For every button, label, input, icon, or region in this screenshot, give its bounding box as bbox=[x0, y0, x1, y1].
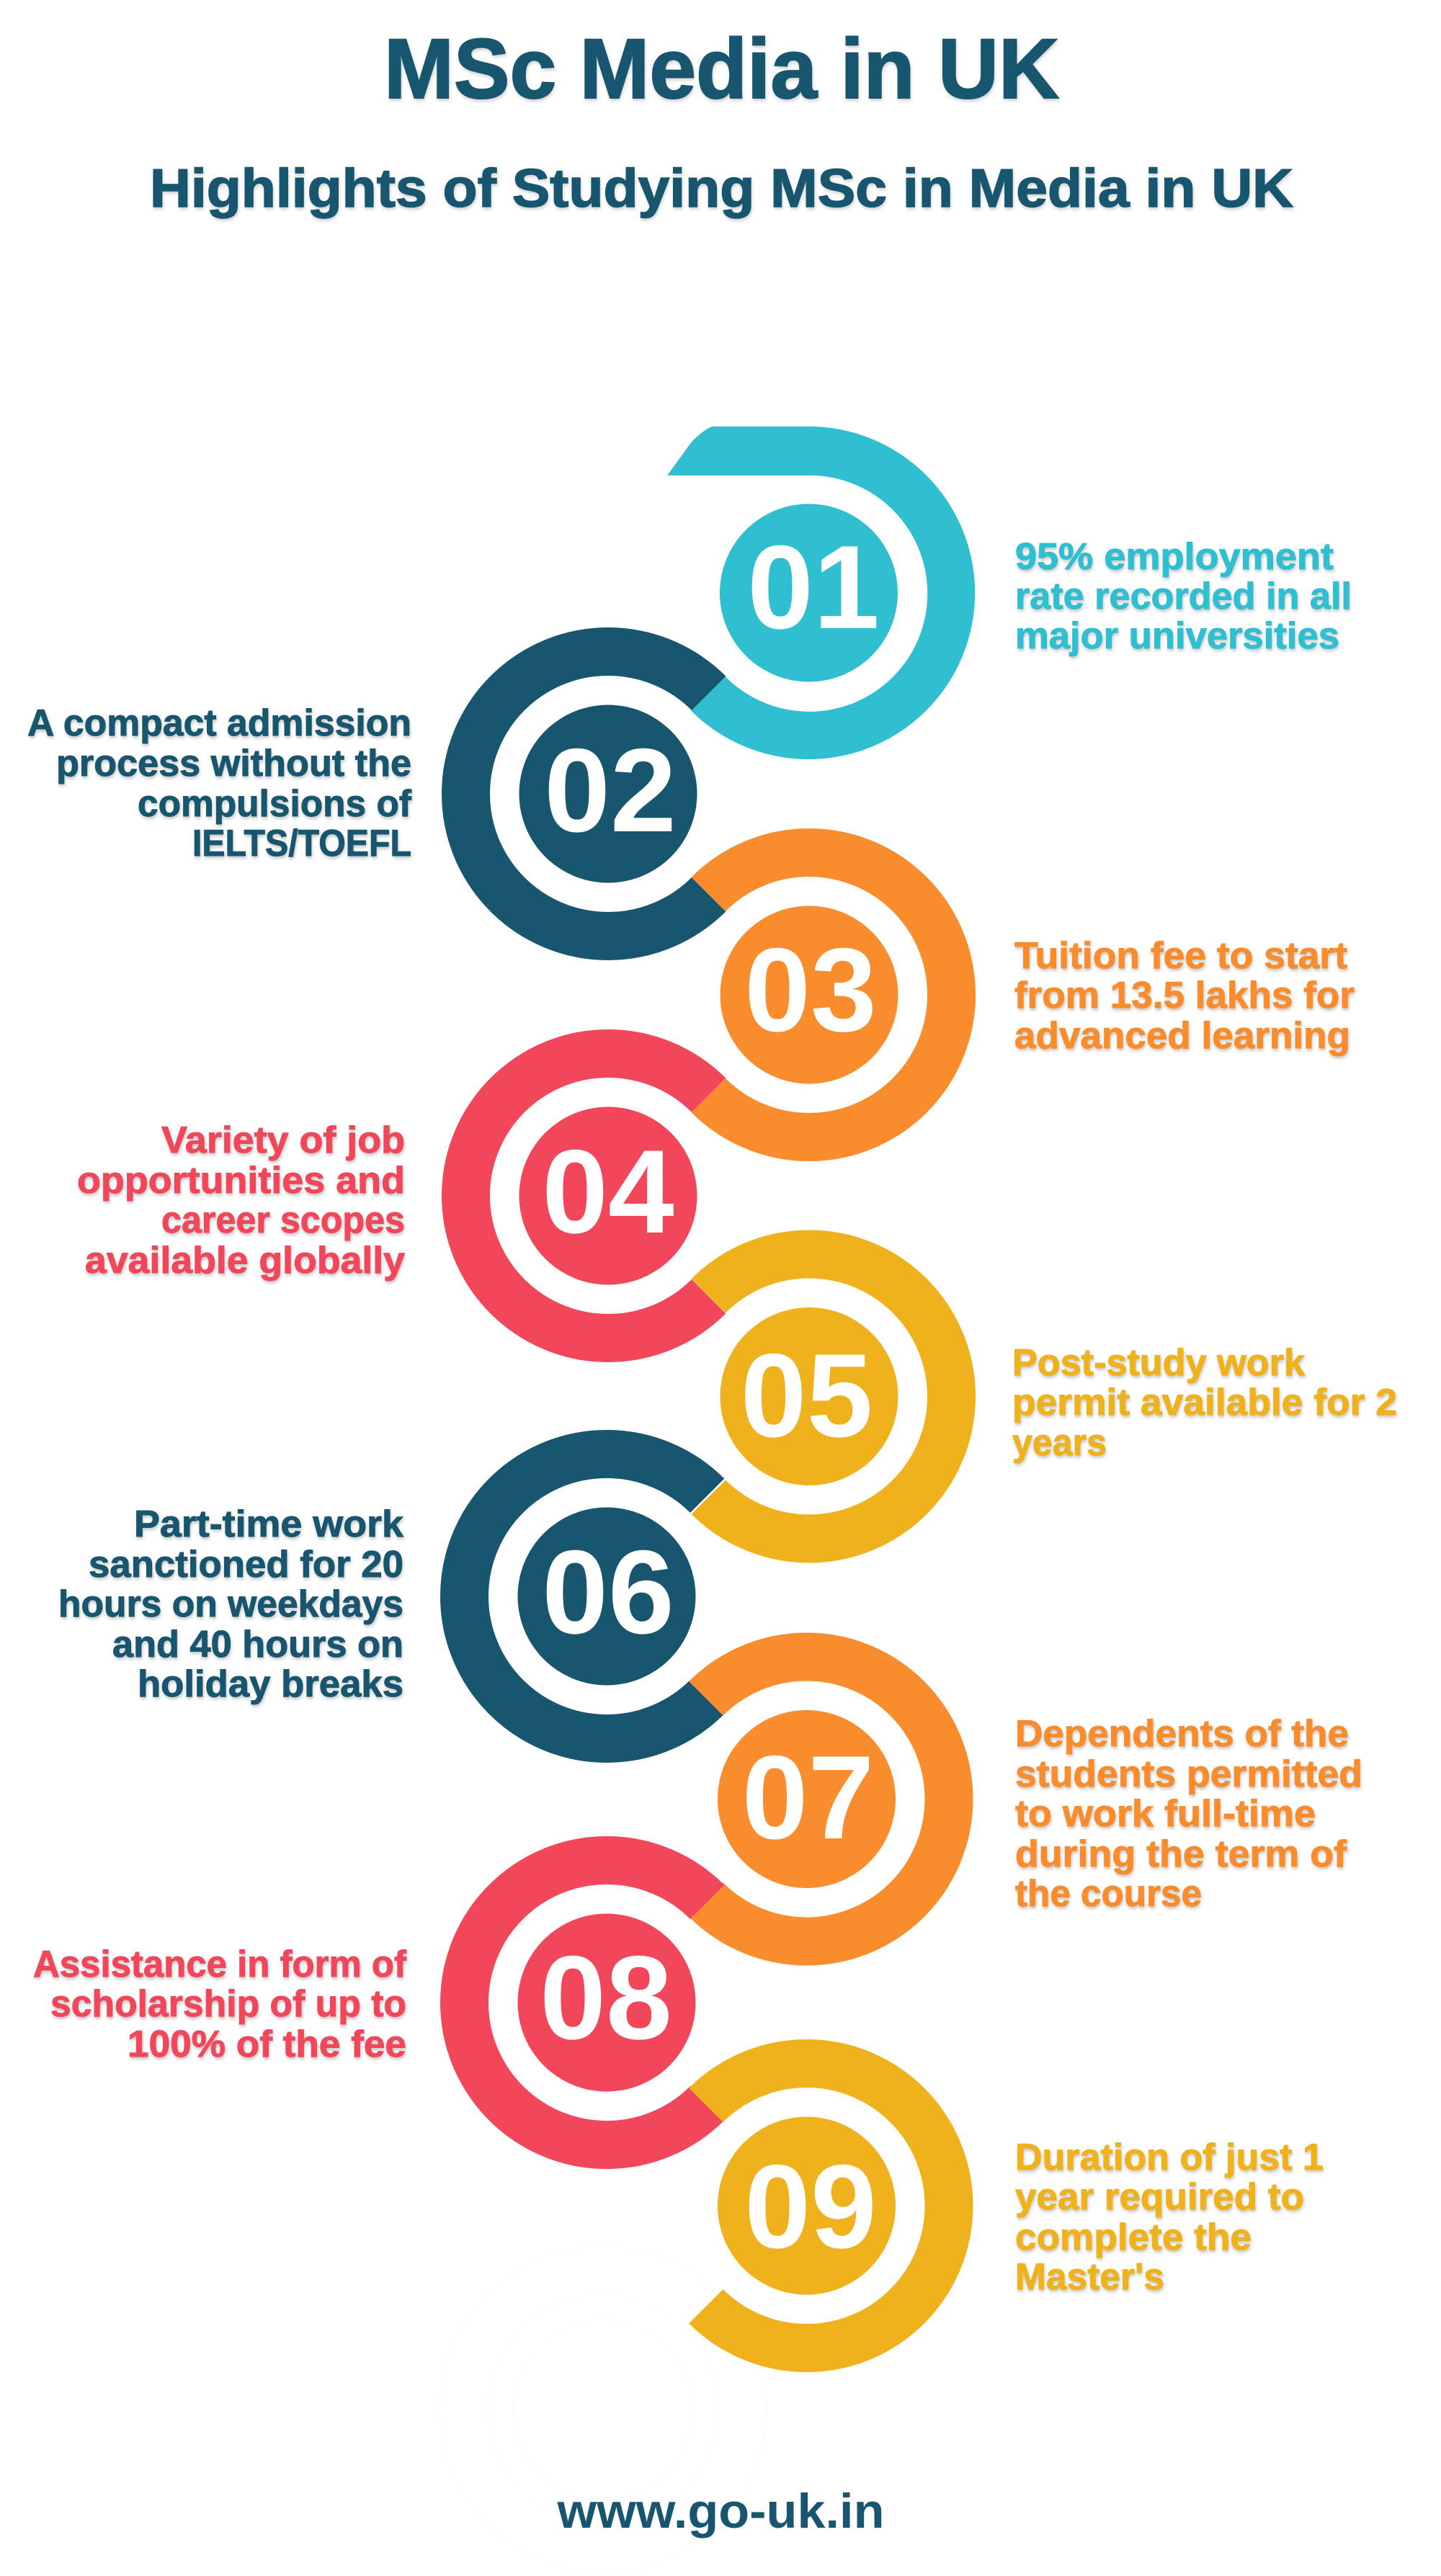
step 06 bbox=[58, 1454, 708, 1739]
badge 03 bbox=[720, 906, 898, 1083]
title: MSc Media in UK bbox=[384, 22, 1059, 117]
text 06 bbox=[58, 1503, 403, 1705]
step 03 bbox=[708, 853, 1355, 1137]
text 02 bbox=[27, 702, 412, 864]
step 09 bbox=[706, 2063, 1324, 2348]
text 04: opportunities and bbox=[77, 1160, 405, 1202]
text 06: and 40 hours on bbox=[112, 1624, 403, 1665]
number 05: 05 bbox=[741, 1329, 873, 1462]
text 08: Assistance in form of bbox=[33, 1944, 407, 1985]
text 06: sanctioned for 20 bbox=[89, 1544, 403, 1586]
text 09: Duration of just 1 bbox=[1015, 2137, 1324, 2178]
step 07 bbox=[706, 1657, 1362, 1941]
step 05 bbox=[708, 1254, 1397, 1539]
text 05: permit available for 2 bbox=[1012, 1382, 1397, 1423]
number 07: 07 bbox=[742, 1731, 874, 1864]
number 01: 01 bbox=[747, 521, 880, 653]
faint ghost circle bbox=[440, 2246, 767, 2573]
ring 04 bbox=[465, 1054, 709, 1338]
subtitle: Highlights of Studying MSc in Media in UK bbox=[150, 158, 1293, 218]
step 01 bbox=[667, 426, 1352, 759]
text 05: Post-study work bbox=[1012, 1342, 1305, 1384]
text 08: 100% of the fee bbox=[128, 2023, 406, 2065]
badge 06 bbox=[517, 1507, 696, 1686]
text 07: the course bbox=[1015, 1873, 1202, 1915]
text 01: 95% employment bbox=[1015, 536, 1334, 578]
text 06: Part-time work bbox=[134, 1503, 403, 1545]
step 08 bbox=[33, 1860, 708, 2145]
ring 06 bbox=[464, 1454, 708, 1739]
text 04: Variety of job bbox=[161, 1119, 405, 1161]
text 06: hours on weekdays bbox=[58, 1583, 403, 1625]
text 03: Tuition fee to start bbox=[1014, 935, 1347, 977]
ring 05 bbox=[708, 1254, 952, 1539]
badge 02 bbox=[519, 705, 697, 883]
text 01 bbox=[1015, 536, 1352, 657]
badge 09 bbox=[718, 2116, 896, 2295]
badge 01 bbox=[720, 504, 898, 681]
text 01: rate recorded in all bbox=[1015, 576, 1352, 617]
footer url: www.go-uk.in bbox=[556, 2484, 885, 2539]
text 04: available globally bbox=[85, 1240, 405, 1282]
text 09: Master's bbox=[1015, 2256, 1164, 2298]
text 02: process without the bbox=[56, 743, 411, 784]
number 03: 03 bbox=[744, 923, 877, 1056]
text 07: Dependents of the bbox=[1015, 1713, 1349, 1755]
text 03: advanced learning bbox=[1014, 1015, 1350, 1057]
badge 05 bbox=[720, 1307, 898, 1485]
badge 08 bbox=[517, 1913, 696, 2092]
ring 01 bbox=[667, 426, 975, 759]
text 04 bbox=[77, 1119, 405, 1282]
badge 04 bbox=[519, 1106, 697, 1285]
text 07: students permitted bbox=[1015, 1753, 1362, 1795]
text 05 bbox=[1012, 1342, 1397, 1464]
step 02 bbox=[27, 651, 709, 936]
number 02: 02 bbox=[544, 724, 677, 857]
text 07: during the term of bbox=[1015, 1833, 1347, 1875]
text 02: compulsions of bbox=[138, 783, 412, 825]
number 06: 06 bbox=[542, 1526, 674, 1658]
text 09: complete the bbox=[1015, 2217, 1252, 2258]
text 05: years bbox=[1012, 1422, 1107, 1464]
text 03: from 13.5 lakhs for bbox=[1014, 975, 1355, 1016]
ring 03 bbox=[708, 853, 952, 1137]
ring 07 bbox=[706, 1657, 949, 1941]
ring 02 bbox=[465, 651, 709, 936]
badge 07 bbox=[718, 1710, 896, 1888]
text 09: year required to bbox=[1015, 2176, 1304, 2218]
number 08: 08 bbox=[540, 1931, 672, 2064]
ring 08 bbox=[464, 1860, 708, 2145]
text 08: scholarship of up to bbox=[50, 1983, 406, 2025]
text 08 bbox=[33, 1944, 407, 2065]
text 01: major universities bbox=[1015, 615, 1339, 657]
text 03 bbox=[1014, 935, 1355, 1057]
text 06: holiday breaks bbox=[138, 1663, 403, 1705]
step 04 bbox=[77, 1054, 709, 1338]
text 07: to work full-time bbox=[1015, 1793, 1316, 1835]
text 07 bbox=[1015, 1713, 1362, 1915]
text 04: career scopes bbox=[161, 1199, 405, 1241]
text 09 bbox=[1015, 2137, 1324, 2298]
number 04: 04 bbox=[542, 1125, 674, 1258]
text 02: IELTS/TOEFL bbox=[192, 823, 411, 864]
text 02: A compact admission bbox=[27, 702, 411, 744]
ring 09 bbox=[706, 2063, 949, 2348]
number 09: 09 bbox=[744, 2140, 877, 2273]
